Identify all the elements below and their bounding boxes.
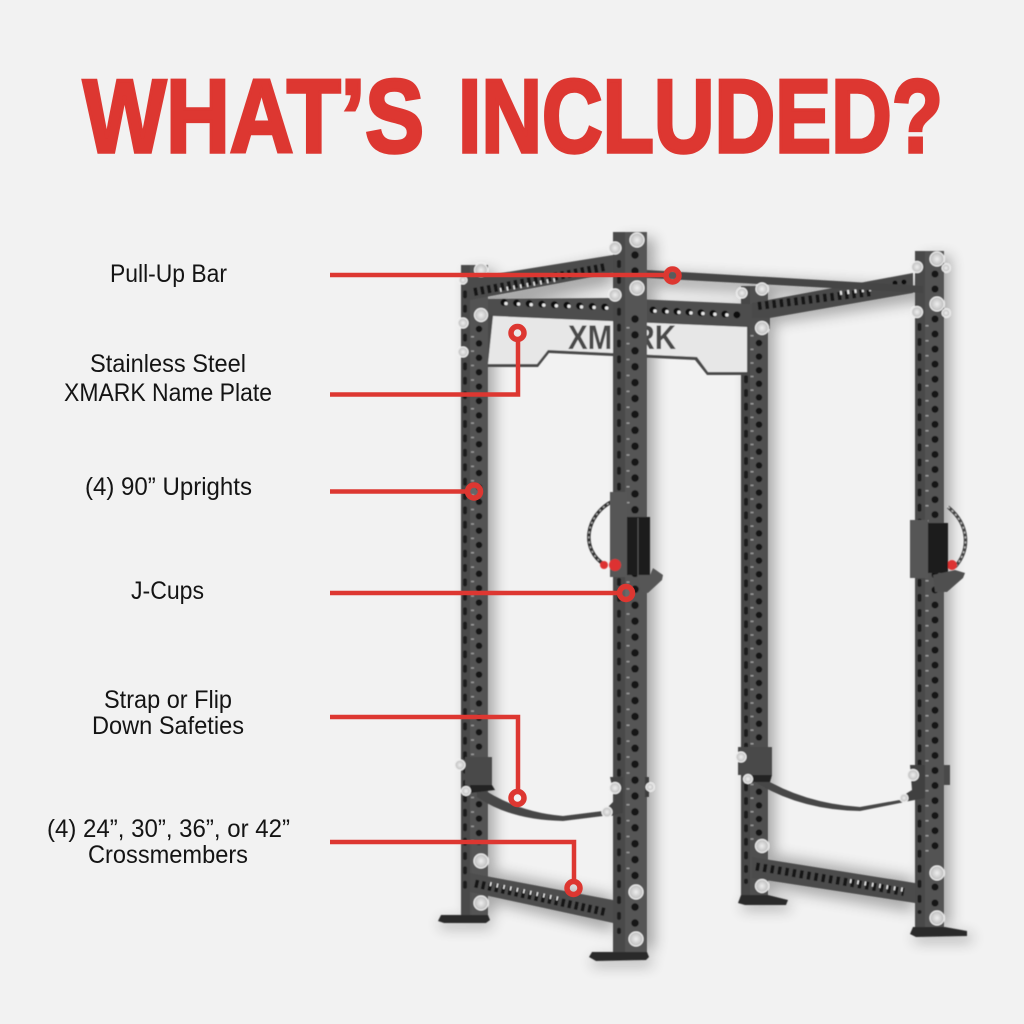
pull-up bar: [647, 270, 923, 293]
title: WHAT’S: [83, 59, 424, 175]
label: crossmembers: Crossmembers: [88, 841, 248, 869]
name plate: [486, 315, 749, 375]
callout: name plate: [330, 326, 524, 394]
callout: crossmembers: [330, 842, 580, 894]
right strap safety: [738, 747, 950, 811]
plate wordmark: XMARK: [568, 319, 676, 357]
label: name plate: [64, 350, 272, 407]
rack shadows: [440, 238, 972, 966]
back-right upright: [738, 286, 788, 905]
j-cup left: [589, 492, 663, 593]
lower left crossmember: [470, 873, 613, 923]
label: safeties: Strap or Flip: [104, 686, 232, 714]
label: crossmembers: (4) 24”, 30”, 36”, or 42”: [47, 815, 290, 843]
callout: uprights: [330, 485, 480, 498]
left top crossmember: [470, 255, 613, 300]
left upright: [438, 265, 490, 923]
power rack illustration: [438, 232, 972, 966]
label: safeties: Down Safeties: [92, 712, 244, 740]
label: name plate: Stainless Steel: [90, 350, 246, 378]
label: name plate: XMARK Name Plate: [64, 379, 272, 407]
labels column: [47, 260, 290, 869]
left strap safety: [465, 757, 649, 821]
label: safeties: [92, 686, 244, 740]
label: crossmembers: [47, 815, 290, 869]
label: pull-up bar: Pull-Up Bar: [110, 260, 227, 288]
title: [83, 59, 943, 175]
label: j-cups: J-Cups: [131, 577, 204, 605]
callout: j-cups: [330, 586, 632, 600]
bolts: [455, 233, 950, 946]
j-cup right: [910, 507, 965, 592]
front-center upright: [589, 232, 649, 961]
right side top crossmember: [752, 273, 913, 318]
lower right crossmember: [752, 857, 915, 903]
right upright: [910, 251, 967, 937]
callout: pull-up bar: [330, 269, 679, 282]
callout: safeties: [330, 717, 524, 804]
back top crossmember: [470, 298, 770, 329]
label: uprights: (4) 90” Uprights: [85, 473, 252, 501]
